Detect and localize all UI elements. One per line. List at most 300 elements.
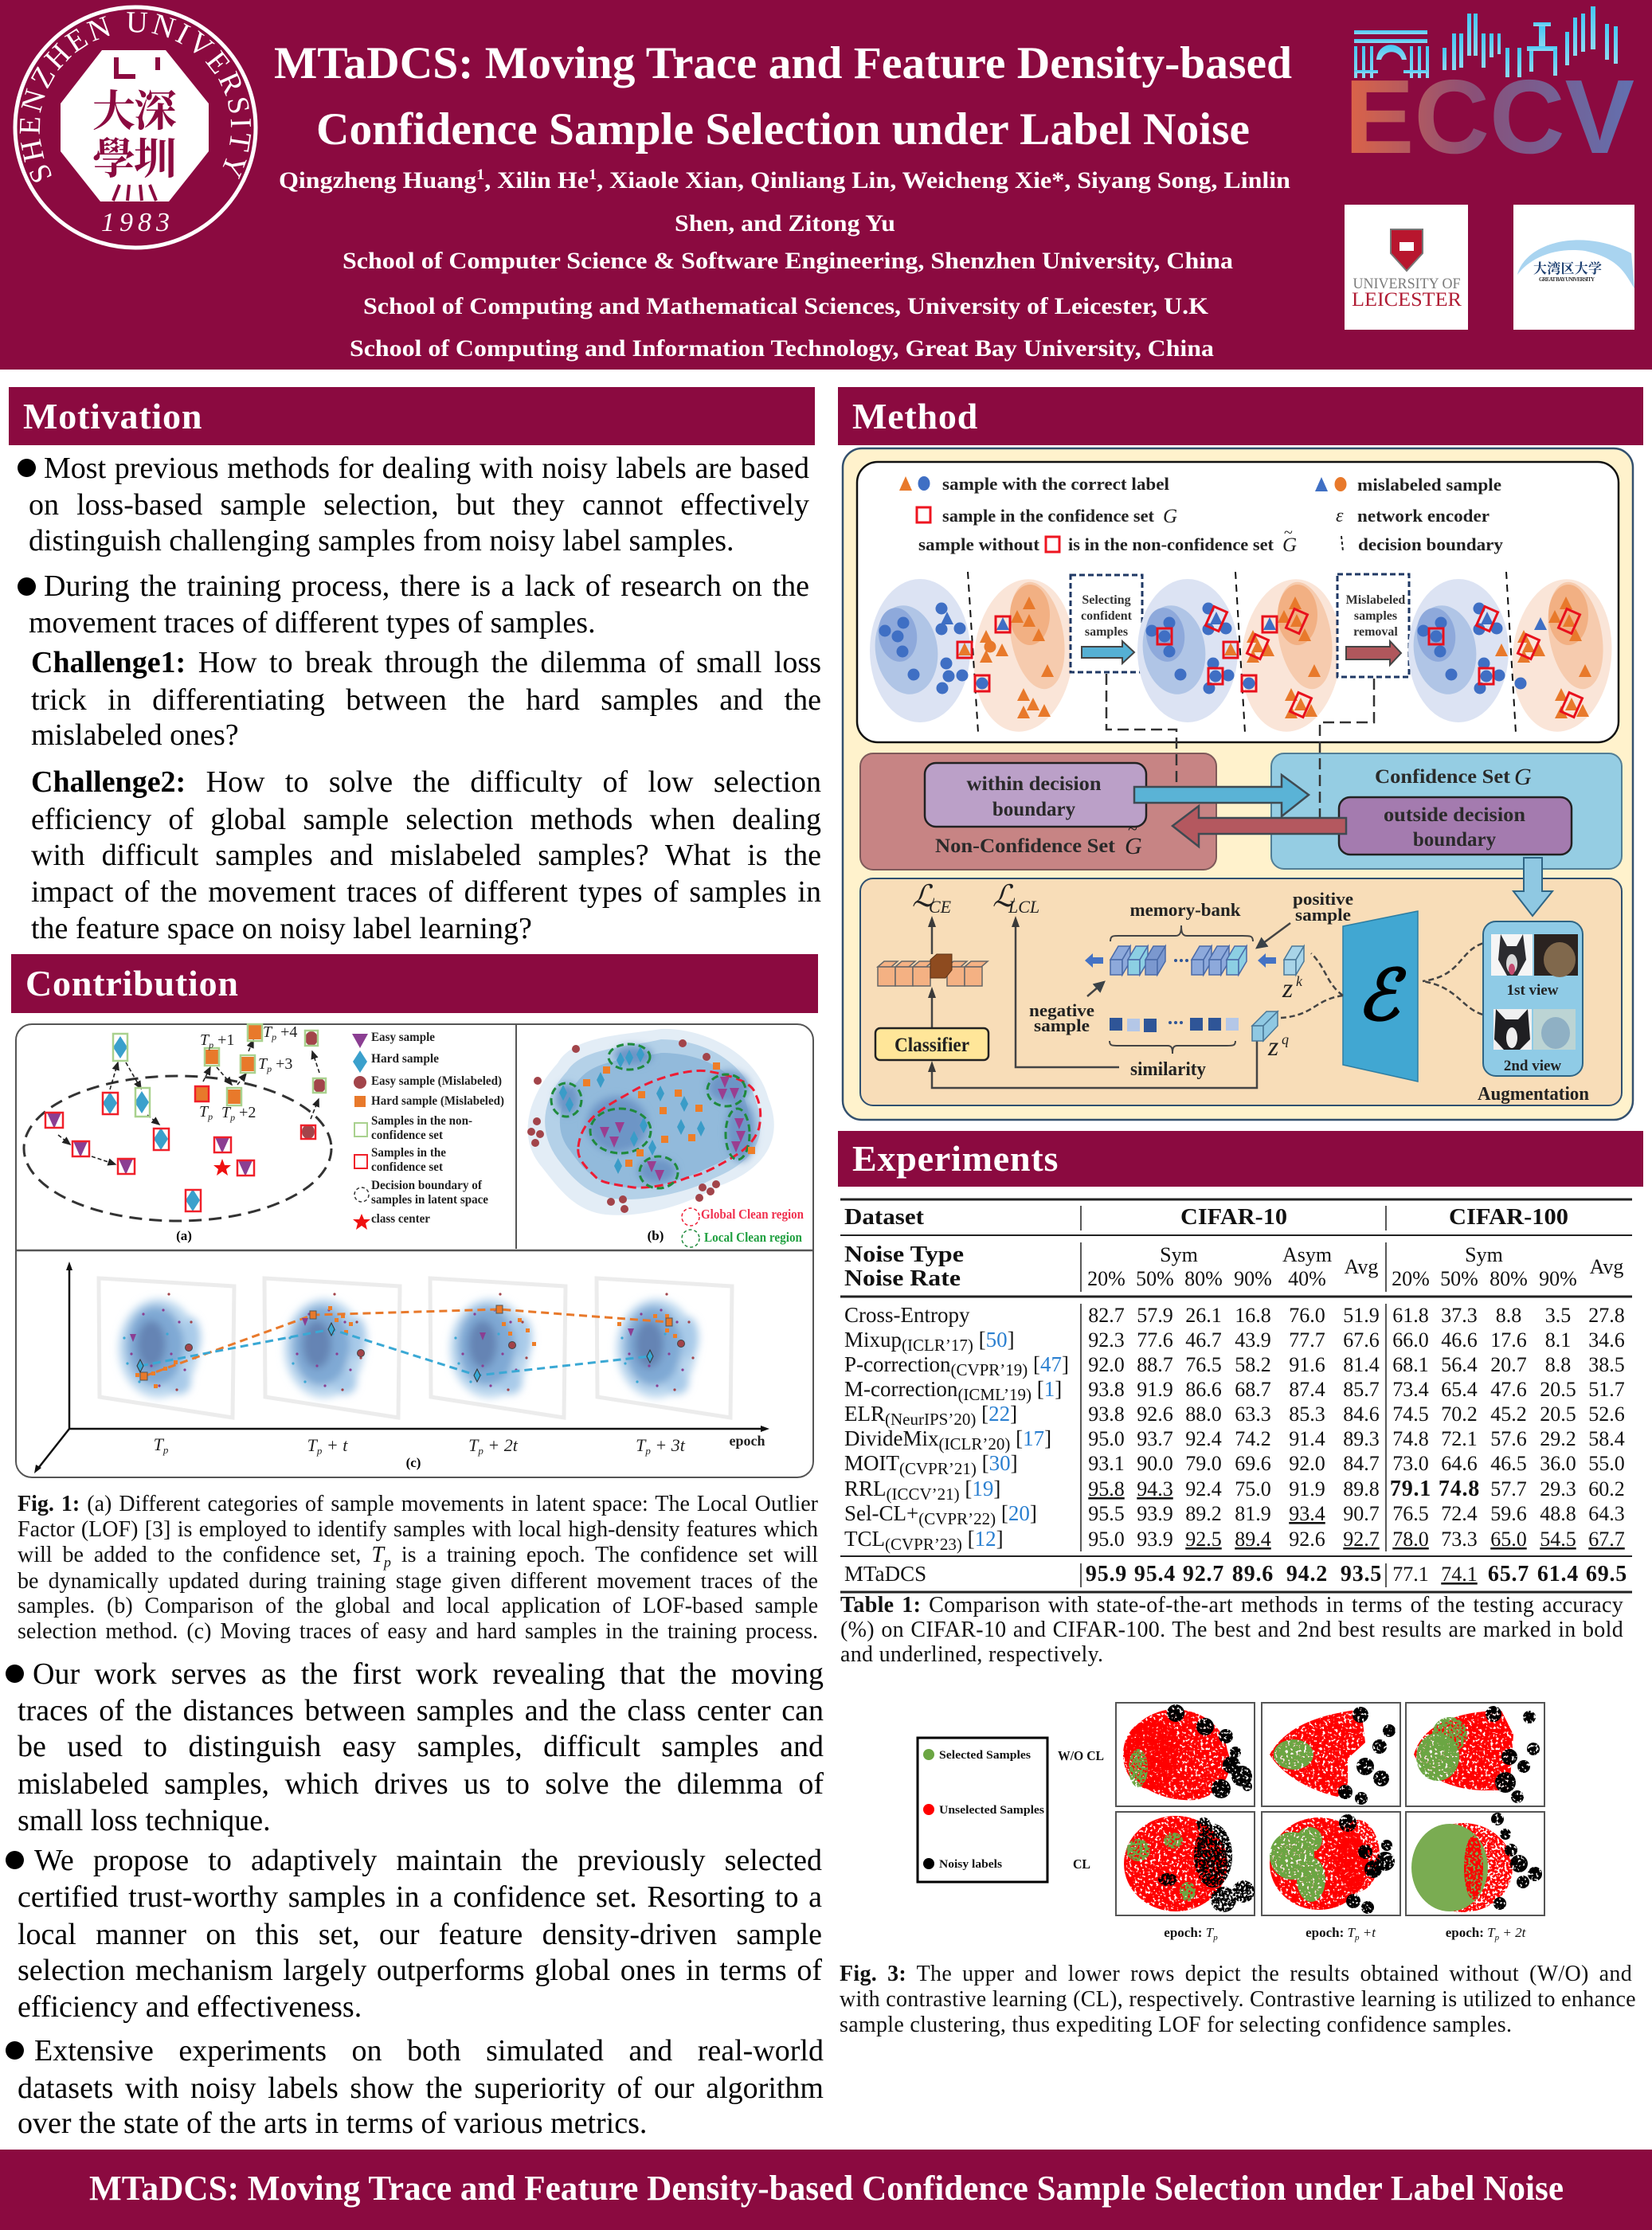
arrow: move to non-confidence set: [1172, 806, 1346, 847]
figure 3: t-SNE scatter comparison: [916, 1702, 1545, 1942]
table values: 55.0: [1588, 1452, 1625, 1475]
row labels: RRL: [844, 1477, 887, 1500]
challenge 2: impact of the movement traces of different types of samples in: [31, 875, 821, 909]
legend: sample types: sample with the correct label: [942, 474, 1169, 494]
logo: Shenzhen University seal: 深: [134, 88, 177, 135]
table values: 57.7: [1490, 1477, 1527, 1500]
table values: 88.7: [1137, 1353, 1173, 1376]
table values: 92.3: [1088, 1328, 1125, 1352]
table caption: (%) on CIFAR-10 and CIFAR-100. The best and 2nd best results are marked in bold: [840, 1618, 1623, 1642]
table values: 92.6: [1289, 1528, 1325, 1551]
panel (c): moving traces over epochs: + t: [322, 1435, 348, 1455]
heading: Method: [838, 387, 1643, 445]
heading: Method: Method: [852, 396, 978, 436]
table values: 89.8: [1343, 1477, 1380, 1500]
scatter: without CL, epoch Tp+2t: [1406, 1703, 1544, 1806]
figure 3 caption: with contrastive learning (CL), respectively. Contrastive learning is utilized to enhance: [840, 1987, 1636, 2012]
contribution bullet 1: [6, 1657, 824, 1837]
table values: 94.2: [1286, 1562, 1328, 1586]
table values: 65.7: [1488, 1562, 1529, 1586]
row labels: CL: [1073, 1856, 1090, 1872]
epoch labels: epoch: T: [1164, 1925, 1213, 1940]
table header: 40%: [1288, 1267, 1326, 1290]
footer banner: MTaDCS: Moving Trace and Feature Density-based Confidence Sample Selection under Label Noise: [89, 2169, 1564, 2208]
table values: 74.8: [1439, 1477, 1480, 1501]
epoch labels: p: [1212, 1933, 1218, 1942]
panel (a): movement categories: p: [266, 1063, 272, 1074]
table values: 87.4: [1289, 1378, 1325, 1401]
table header: 50%: [1440, 1267, 1478, 1290]
table header: 50%: [1136, 1267, 1174, 1290]
scatter: without CL, epoch Tp: [1116, 1703, 1255, 1806]
affiliations: [343, 248, 1233, 362]
table values: 93.9: [1137, 1502, 1173, 1525]
panel (b): density map: Local Clean region: [704, 1230, 802, 1245]
z-k feature: [1282, 946, 1304, 1003]
table values: 95.5: [1088, 1502, 1125, 1525]
row labels: [: [977, 1451, 989, 1475]
table values: 65.0: [1490, 1528, 1527, 1551]
table values: 95.9: [1086, 1562, 1127, 1586]
table values: 17.6: [1490, 1328, 1527, 1352]
table values: 92.7: [1183, 1562, 1224, 1586]
augmentation views: Augmentation: [1478, 1084, 1589, 1105]
panel (a): movement categories: [24, 1023, 331, 1243]
row labels: P-correction: [844, 1352, 950, 1376]
authors: Shen, and Zitong Yu: [675, 210, 895, 237]
table values: 66.0: [1392, 1328, 1429, 1352]
panel (b): density map: [527, 1029, 804, 1247]
table values: 29.3: [1540, 1477, 1576, 1500]
row labels: (ICCV’21): [887, 1485, 960, 1504]
authors: 1: [476, 166, 484, 183]
epoch labels: epoch: T: [1446, 1925, 1495, 1940]
figure 1 panel: [15, 1023, 814, 1478]
row labels: 30]: [989, 1451, 1018, 1475]
panel (c): moving traces over epochs: p: [644, 1445, 651, 1457]
table values: 69.5: [1586, 1562, 1627, 1586]
figure 1 legend: Decision boundary of: [371, 1179, 483, 1192]
table values: 20.5: [1540, 1378, 1576, 1401]
figure 1 caption: be dynamically updated during training stage given different movement traces of the: [18, 1569, 818, 1594]
augmentation views: [1478, 921, 1589, 1105]
table values: 69.6: [1235, 1452, 1271, 1475]
clusters: after removal: [1408, 572, 1619, 737]
figure 1 caption: Factor (LOF) [3] is employed to identify samples with local high-density features which: [18, 1517, 818, 1542]
augmentation views: 2nd view: [1504, 1058, 1561, 1074]
figure 3 legend: Selected Samples: [939, 1749, 1031, 1762]
mislabeled samples removal step: [1337, 574, 1409, 677]
table header: Noise Rate: [844, 1266, 961, 1291]
table values: 43.9: [1235, 1328, 1271, 1352]
loss labels: LCL: [1008, 897, 1039, 917]
row labels: (NeurIPS’20): [885, 1410, 976, 1429]
figure 3 legend: Unselected Samples: [939, 1804, 1044, 1817]
table header: 90%: [1539, 1267, 1577, 1290]
panel (a): movement categories: +4: [276, 1023, 297, 1041]
table values: 61.8: [1392, 1304, 1429, 1327]
legend: sample types: decision boundary: [1358, 534, 1503, 554]
contribution bullet 3: datasets with noisy labels show the superiority of our algorithm: [18, 2072, 824, 2105]
challenge 2: with difficult samples and mislabeled samples? What is the: [31, 839, 821, 872]
table values: 37.3: [1441, 1304, 1478, 1327]
row labels: [: [973, 1328, 986, 1352]
row labels: 47]: [1040, 1352, 1069, 1376]
logo: Shenzhen University seal: 學: [92, 135, 135, 183]
table values: 93.8: [1088, 1403, 1125, 1426]
table caption: [840, 1593, 1623, 1667]
table values: 92.5: [1185, 1528, 1222, 1551]
table values: 67.6: [1343, 1328, 1380, 1352]
figure 1 legend: Easy sample (Mislabeled): [371, 1074, 502, 1088]
row labels: (ICLR’17): [902, 1336, 973, 1355]
table header: 80%: [1184, 1267, 1223, 1290]
table values: 77.7: [1289, 1328, 1325, 1352]
motivation bullet 2: movement traces of different types of samples.: [29, 606, 596, 640]
logo: Shenzhen University seal: 大: [92, 88, 135, 135]
dashed feature flows: [1281, 941, 1491, 1018]
table values: 92.7: [1343, 1528, 1380, 1551]
figure 1 caption: [18, 1492, 818, 1644]
row labels: 1]: [1044, 1377, 1062, 1401]
epoch labels: epoch: T: [1306, 1925, 1355, 1940]
legend: sample types: [899, 474, 1503, 556]
table header: [844, 1205, 1623, 1291]
row labels: M-correction: [844, 1377, 957, 1401]
panel (a): movement categories: +1: [213, 1031, 234, 1049]
contribution bullet 2: local manner on this set, our feature density-driven sample: [18, 1918, 822, 1951]
table values: 8.1: [1545, 1328, 1571, 1352]
table values: 75.0: [1235, 1477, 1271, 1500]
table values: 89.4: [1235, 1528, 1271, 1551]
table values: 73.3: [1441, 1528, 1478, 1551]
method diagram: [841, 448, 1634, 1121]
classifier head: Classifier: [895, 1035, 969, 1056]
table values: 27.8: [1588, 1304, 1625, 1327]
scatter: without CL, epoch Tp+t: [1262, 1703, 1400, 1806]
table values: 89.3: [1343, 1427, 1380, 1450]
epoch labels: +t: [1359, 1925, 1376, 1940]
negative sample label: sample: [1034, 1015, 1090, 1035]
table values: 68.7: [1235, 1378, 1271, 1401]
authors: [279, 166, 1290, 237]
epoch labels: p: [1354, 1933, 1360, 1942]
network encoder: [1343, 911, 1418, 1082]
row labels: DivideMix: [844, 1426, 938, 1450]
row labels: 19]: [972, 1477, 1000, 1500]
table values: 46.7: [1185, 1328, 1222, 1352]
affiliations: School of Computing and Mathematical Sciences, University of Leicester, U.K: [363, 293, 1209, 319]
connectors: dashed links from selection steps: [1106, 674, 1374, 818]
logo: University of Leicester: LEICESTER: [1352, 289, 1462, 311]
table values: 74.1: [1441, 1563, 1478, 1586]
title: [274, 38, 1292, 155]
affiliations: School of Computing and Information Technology, Great Bay University, China: [350, 335, 1214, 362]
logo: Shenzhen University seal: 1983: [101, 208, 170, 237]
table values: 46.6: [1441, 1328, 1478, 1352]
figure 1 legend: class center: [371, 1212, 430, 1226]
table values: 84.7: [1343, 1452, 1380, 1475]
panel: non-confidence set: [860, 753, 1216, 870]
table values: 8.8: [1545, 1353, 1571, 1376]
selecting confident samples step: samples: [1085, 625, 1128, 639]
table values: 72.1: [1441, 1427, 1478, 1450]
panel (a): movement categories: T: [263, 1023, 272, 1041]
contribution bullet 1: mislabeled samples, which drives us to solve the dilemma of: [18, 1767, 824, 1801]
similarity vector: similarity: [1130, 1059, 1206, 1080]
table values: 81.4: [1343, 1353, 1380, 1376]
table values: 36.0: [1540, 1452, 1576, 1475]
row labels: ELR: [844, 1402, 885, 1426]
motivation bullet 2: [18, 569, 809, 640]
table values: 85.7: [1343, 1378, 1380, 1401]
loss labels: [912, 878, 1039, 917]
logo: Shenzhen University seal: SHENZHEN UNIVERSITY: [19, 12, 252, 182]
legend: sample types: is in the non-confidence set: [1068, 534, 1274, 554]
table header: 90%: [1234, 1267, 1272, 1290]
challenge 2: Challenge2: How to solve the difficulty of low selection: [31, 765, 821, 799]
panel (a): movement categories: p: [208, 1039, 213, 1050]
table values: 45.2: [1490, 1403, 1527, 1426]
memory bank: [1085, 900, 1276, 975]
table header: Noise Type: [844, 1242, 964, 1267]
table values: 91.4: [1289, 1427, 1325, 1450]
figure 1 caption: Fig. 1: (a) Different categories of sample movements in latent space: The Local Outlier: [18, 1492, 818, 1516]
table values: 59.6: [1490, 1502, 1527, 1525]
row labels: Cross-Entropy: [844, 1303, 970, 1327]
mislabeled samples removal step: removal: [1353, 625, 1398, 639]
table header: CIFAR-10: [1180, 1205, 1287, 1230]
row labels: W/O CL: [1058, 1748, 1104, 1763]
table values: 85.3: [1289, 1403, 1325, 1426]
figure 3 caption: Fig. 3: The upper and lower rows depict the results obtained without (W/O) and: [840, 1962, 1632, 1986]
table values: 93.4: [1289, 1502, 1325, 1525]
panel (c): moving traces over epochs: [34, 1262, 769, 1473]
authors: , Xilin He: [484, 167, 589, 194]
panel (a): movement categories: T: [199, 1103, 208, 1121]
table caption: and underlined, respectively.: [840, 1642, 1103, 1667]
panel (b): density map: Global Clean region: [701, 1207, 804, 1222]
logo: Shenzhen University seal: 圳: [134, 135, 177, 183]
legend: sample types: G: [1282, 534, 1297, 556]
figure 1 legend: confidence set: [371, 1129, 444, 1142]
panel (a): movement categories: +3: [272, 1055, 292, 1073]
legend: sample types: network encoder: [1357, 506, 1490, 526]
memory bank: memory-bank: [1129, 900, 1241, 920]
loss labels: ℒ: [992, 878, 1016, 914]
row labels: 20]: [1008, 1501, 1037, 1525]
title: MTaDCS: Moving Trace and Feature Density-based: [274, 38, 1292, 88]
panel: non-confidence set: boundary: [992, 799, 1076, 820]
panel (c): moving traces over epochs: T: [307, 1435, 317, 1455]
positive sample label: sample: [1295, 905, 1351, 925]
panel (a): movement categories: T: [221, 1104, 230, 1121]
motivation bullet 1: Most previous methods for dealing with noisy labels are based: [44, 452, 809, 485]
table values: 38.5: [1588, 1353, 1625, 1376]
classifier head: [875, 916, 988, 1060]
row labels: [: [1028, 1352, 1040, 1376]
challenge 2: [31, 765, 821, 945]
table values: [1086, 1304, 1627, 1586]
footer banner: [0, 2150, 1652, 2230]
panel: contrastive training: [860, 858, 1622, 1105]
table header: CIFAR-100: [1449, 1205, 1568, 1230]
z-k feature: k: [1296, 973, 1303, 989]
table values: 29.2: [1540, 1427, 1576, 1450]
challenge 2: efficiency of global sample selection methods when dealing: [31, 803, 821, 836]
logo: Great Bay University: 大湾区大学: [1533, 260, 1602, 276]
network encoder: ℰ: [1356, 953, 1407, 1036]
authors: Qingzheng Huang: [279, 167, 464, 194]
panel (c): moving traces over epochs: T: [468, 1435, 478, 1455]
table values: 20.5: [1540, 1403, 1576, 1426]
row labels: (CVPR’23): [885, 1535, 962, 1554]
epoch labels: p: [1494, 1933, 1500, 1942]
table values: 74.8: [1392, 1427, 1429, 1450]
table values: 93.7: [1137, 1427, 1173, 1450]
table values: 51.7: [1588, 1378, 1625, 1401]
similarity vector: [1110, 1018, 1239, 1080]
row labels: 12]: [975, 1527, 1004, 1551]
heading: Contribution: Contribution: [25, 963, 239, 1003]
table values: 47.6: [1490, 1378, 1527, 1401]
selecting confident samples step: [1071, 575, 1142, 672]
legend: sample types: sample in the confidence set: [942, 506, 1155, 526]
mislabeled samples removal step: samples: [1354, 609, 1397, 623]
table values: 92.0: [1088, 1353, 1125, 1376]
table values: 65.4: [1441, 1378, 1478, 1401]
loss labels: CE: [929, 897, 952, 917]
table values: 92.4: [1185, 1427, 1222, 1450]
row labels: 17]: [1023, 1426, 1051, 1450]
panel: non-confidence set: ~: [1128, 819, 1137, 839]
loss labels: ℒ: [912, 878, 935, 914]
table values: 34.6: [1588, 1328, 1625, 1352]
table header: Avg: [1345, 1255, 1378, 1278]
row labels: 22]: [988, 1402, 1017, 1426]
contribution bullet 2: efficiency and effectiveness.: [18, 1990, 362, 2024]
row labels: MTaDCS: [844, 1562, 926, 1586]
table values: 73.4: [1392, 1378, 1429, 1401]
header banner: [0, 0, 1652, 370]
table values: 61.4: [1537, 1562, 1579, 1586]
authors: 1: [589, 166, 597, 183]
table values: 92.6: [1137, 1403, 1173, 1426]
table values: 88.0: [1185, 1403, 1222, 1426]
image: 1st view dog and cat: [1491, 934, 1578, 977]
panel (a): movement categories: T: [258, 1055, 267, 1073]
legend: sample types: mislabeled sample: [1357, 475, 1501, 495]
panel: confidence set: Confidence Set: [1375, 766, 1511, 788]
figure 1 legend: Hard sample: [371, 1052, 439, 1066]
title: Confidence Sample Selection under Label Noise: [316, 104, 1250, 155]
logo: Great Bay University: GREAT BAY UNIVERSITY: [1539, 276, 1595, 283]
row labels: (ICLR’20): [938, 1434, 1010, 1453]
panel: confidence set: [1271, 753, 1622, 869]
challenge 2: the feature space on noisy label learning?: [31, 912, 532, 945]
table values: 60.2: [1588, 1477, 1625, 1500]
panel (b): density map: (b): [648, 1228, 664, 1243]
heading: Motivation: Motivation: [23, 396, 202, 436]
table values: 77.1: [1392, 1563, 1429, 1586]
table values: 79.0: [1185, 1452, 1222, 1475]
table values: 58.2: [1235, 1353, 1271, 1376]
z-q feature: q: [1282, 1031, 1289, 1047]
figure 1 legend: Samples in the non-: [371, 1114, 472, 1128]
figure 1 legend: Hard sample (Mislabeled): [371, 1094, 504, 1108]
row labels: [: [996, 1501, 1008, 1525]
table values: 77.6: [1137, 1328, 1173, 1352]
figure 1 legend: samples in latent space: [371, 1193, 488, 1207]
table values: 56.4: [1441, 1353, 1478, 1376]
flow lines: [932, 921, 1257, 1088]
panel (c): moving traces over epochs: p: [316, 1445, 323, 1457]
table values: 74.5: [1392, 1403, 1429, 1426]
panel (a): movement categories: (a): [176, 1228, 192, 1243]
table values: 91.9: [1289, 1477, 1325, 1500]
panel: non-confidence set: G: [1125, 833, 1142, 859]
contribution bullet 1: small loss technique.: [18, 1804, 271, 1837]
table values: 20.7: [1490, 1353, 1527, 1376]
authors: , Xiaole Xian, Qinliang Lin, Weicheng Xie*, Siyang Song, Linlin: [597, 167, 1290, 194]
figure 3 legend: Noisy labels: [939, 1858, 1002, 1871]
contribution bullet 2: [6, 1844, 822, 2024]
table header: 20%: [1087, 1267, 1125, 1290]
table values: 70.2: [1441, 1403, 1478, 1426]
table values: 78.0: [1392, 1528, 1429, 1551]
results table: [840, 1198, 1632, 1593]
logo: ECCV: ECCV: [1345, 58, 1634, 175]
row labels: TCL: [844, 1527, 885, 1551]
table values: 95.0: [1088, 1528, 1125, 1551]
contribution bullet 2: selection mechanism largely outperforms global ones in terms of: [18, 1954, 822, 1987]
mislabeled samples removal step: Mislabeled: [1346, 593, 1405, 607]
contribution bullet 2: We propose to adaptively maintain the previously selected: [34, 1844, 822, 1877]
table values: 63.3: [1235, 1403, 1271, 1426]
scatter: with CL, epoch Tp+t: [1262, 1812, 1400, 1915]
motivation bullet 1: distinguish challenging samples from noisy label samples.: [29, 524, 734, 558]
table values: 74.2: [1235, 1427, 1271, 1450]
row labels: (CVPR’22): [918, 1509, 996, 1528]
row labels: [: [962, 1527, 975, 1551]
legend: sample types: ε: [1336, 506, 1344, 526]
table values: 93.1: [1088, 1452, 1125, 1475]
challenge 1: mislabeled ones?: [31, 718, 239, 752]
heading: Experiments: [838, 1131, 1643, 1187]
panel: confidence set: outside decision: [1384, 804, 1525, 826]
challenge 1: trick in differentiating between the hard samples and the: [31, 683, 821, 717]
panel (c): moving traces over epochs: p: [162, 1444, 169, 1456]
motivation bullet 1: [18, 452, 809, 558]
table values: 73.0: [1392, 1452, 1429, 1475]
figure 1 caption: selection method. (c) Moving traces of easy and hard samples in the training process.: [18, 1619, 818, 1644]
table values: 57.9: [1137, 1304, 1173, 1327]
table values: 46.5: [1490, 1452, 1527, 1475]
table values: 26.1: [1185, 1304, 1222, 1327]
panel (c): moving traces over epochs: T: [154, 1434, 163, 1454]
panel (a): movement categories: p: [207, 1111, 213, 1122]
table values: 58.4: [1588, 1427, 1625, 1450]
table values: 57.6: [1490, 1427, 1527, 1450]
table values: 82.7: [1088, 1304, 1125, 1327]
row labels: Sel-CL+: [844, 1501, 918, 1525]
table values: 68.1: [1392, 1353, 1429, 1376]
panel (a): movement categories: p: [229, 1112, 235, 1123]
z-k feature: z: [1282, 974, 1293, 1003]
panel (a): movement categories: T: [200, 1031, 209, 1049]
table values: 76.5: [1392, 1502, 1429, 1525]
legend: sample types: G: [1163, 506, 1177, 527]
